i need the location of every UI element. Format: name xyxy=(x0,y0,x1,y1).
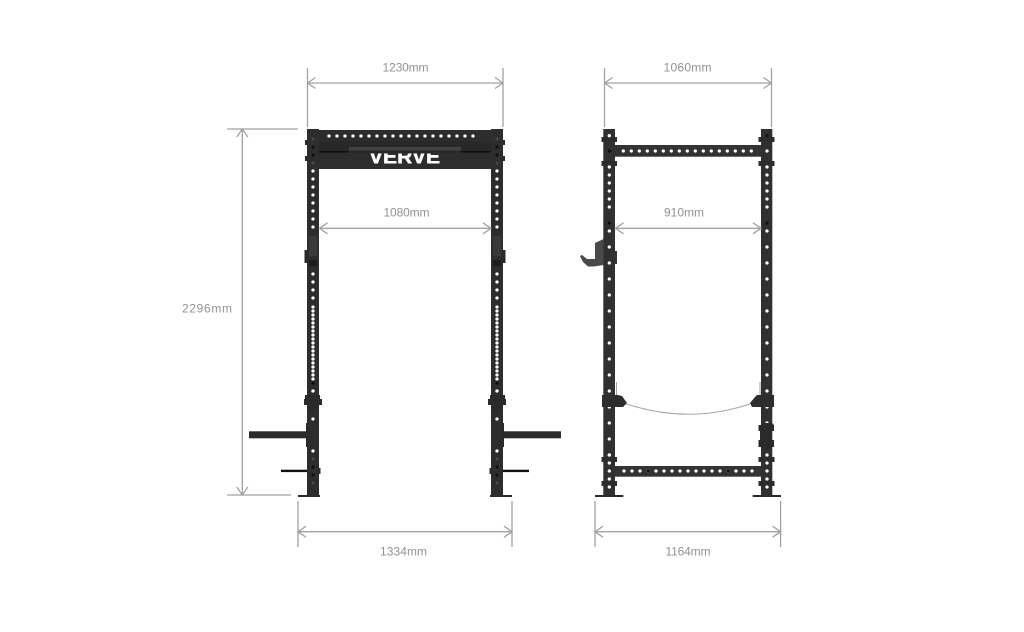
dimension: 1230mm xyxy=(308,60,503,127)
dimension: 1060mm xyxy=(604,60,772,127)
side right post xyxy=(753,129,781,497)
dimension: 1164mm: 1164mm xyxy=(666,544,710,558)
front view rack xyxy=(249,129,561,497)
front right post xyxy=(488,129,561,497)
dimension: 1164mm xyxy=(595,501,781,558)
side left post xyxy=(595,129,623,497)
dimension: 1334mm xyxy=(298,501,512,558)
side top crossbar xyxy=(615,145,761,157)
storage attachment on right post xyxy=(758,423,774,449)
dimension: 2296mm: 2296mm xyxy=(182,301,232,315)
front top crossbar xyxy=(319,130,491,169)
dimension: 1080mm xyxy=(320,205,491,234)
dimension: 2296mm xyxy=(182,129,298,495)
side bottom crossbar xyxy=(615,466,761,477)
dimension: 910mm: 910mm xyxy=(664,205,704,219)
dimension: 1334mm: 1334mm xyxy=(380,544,427,558)
logo: VERVE: VERVE xyxy=(369,146,440,168)
dimension: 910mm xyxy=(616,205,761,234)
dimension: 1060mm: 1060mm xyxy=(664,60,712,74)
dimension: 1230mm: 1230mm xyxy=(382,60,428,74)
side view rack xyxy=(580,129,781,497)
safety strap xyxy=(602,382,774,414)
J-hook xyxy=(580,239,617,266)
front left post xyxy=(249,129,322,497)
dimension: 1080mm: 1080mm xyxy=(384,205,430,219)
